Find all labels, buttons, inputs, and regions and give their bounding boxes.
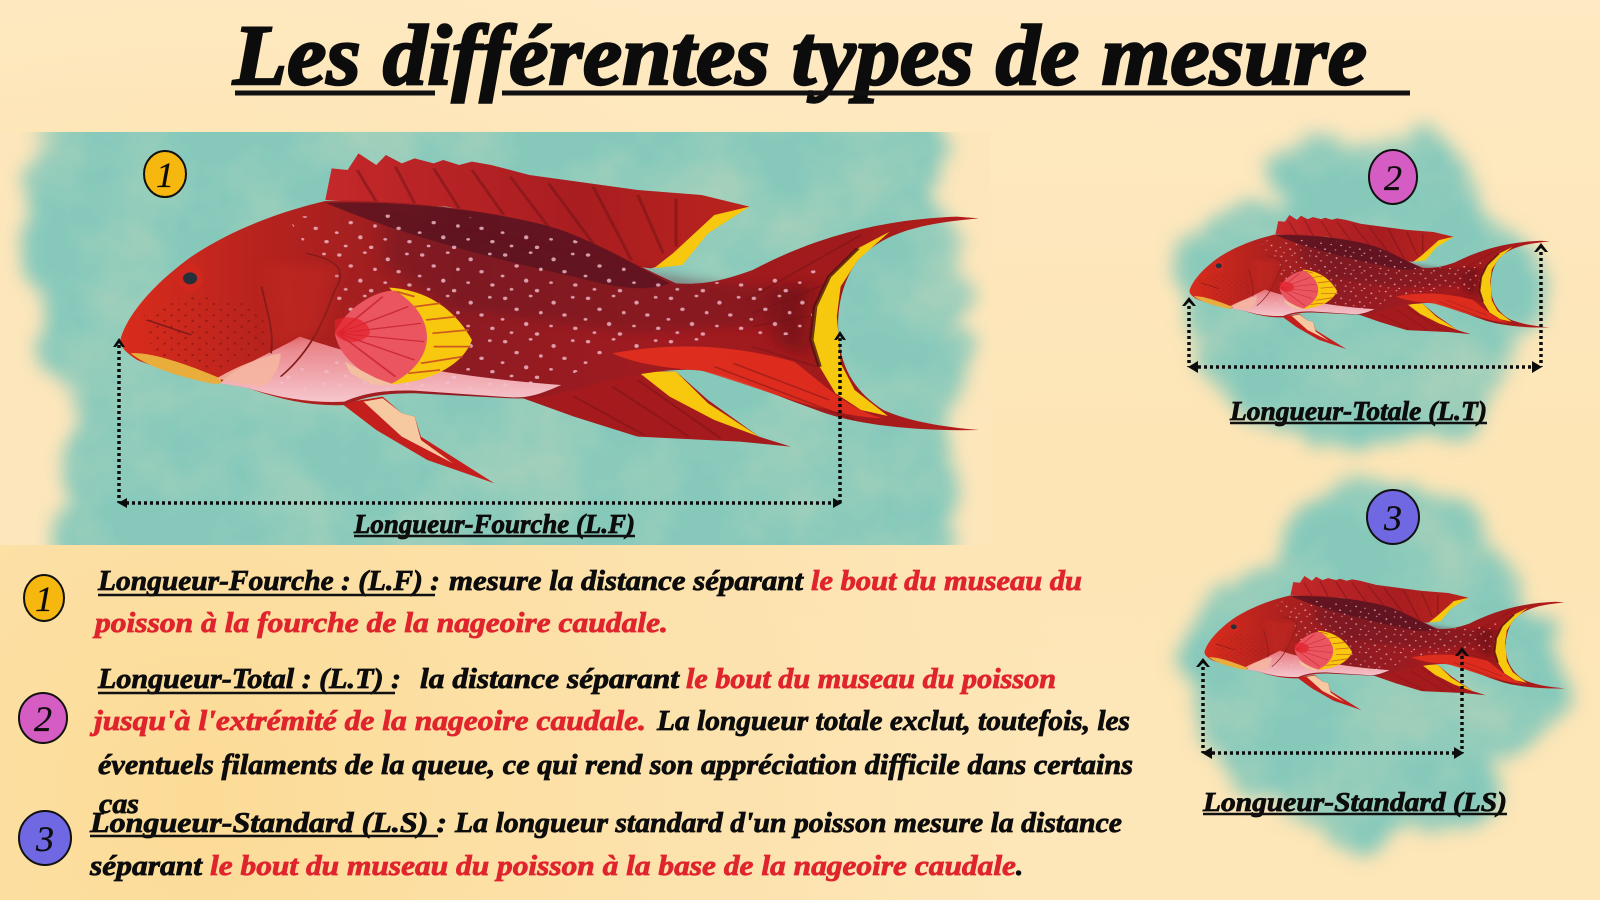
icon: badge 3 [19,811,71,865]
fish illustration [120,153,979,483]
icon: badge 1: 1 [156,155,174,195]
fish illustration [1205,576,1565,710]
icon: badge 2: 2 [1384,158,1402,198]
text block: total length definition: Longueur-Total : (L.T) : [97,663,401,695]
icon: badge 1 [24,575,64,621]
icon: badge 3: 3 [35,819,54,859]
text block: total length definition: la distance séparant [420,663,680,695]
panel: main fish, fork length [0,132,987,545]
text block: fork length definition: le bout du museau du [811,565,1082,597]
text block: total length definition: cas [99,788,139,820]
text block: standard length definition [19,807,1122,882]
watercolour backdrop [0,132,987,545]
title: Les différentes types de mesure [232,7,1367,103]
caption: Longueur-Totale: Longueur-Totale (L.T) [1229,396,1487,426]
icon: badge 2: 2 [34,699,52,739]
icon: badge 3 [1367,490,1419,544]
text block: fork length definition: Longueur-Fourche : (L.F) : [97,565,440,597]
icon: badge 1 [144,151,186,197]
panel: total length figure [1175,135,1550,445]
arrow: standard length measure [1196,647,1469,759]
text block: fork length definition [24,565,1082,639]
text block: fork length definition: poisson à la fourche de la nageoire caudale. [92,607,668,639]
icon: badge 3: 3 [1383,498,1402,538]
text block: fork length definition: mesure la distance séparant [449,565,804,597]
text block: standard length definition: Longueur-Standard (L.S) : [89,807,447,839]
watercolour backdrop [1180,485,1565,840]
text block: standard length definition: séparant [89,850,203,882]
text block: total length definition [19,663,1133,820]
watercolour backdrop [1175,135,1545,445]
text block: total length definition: jusqu'à l'extrémité de la nageoire caudale. [90,705,646,737]
text block: total length definition: La longueur totale exclut, toutefois, les [656,705,1130,737]
caption: Longueur-Fourche: Longueur-Fourche (L.F) [353,509,635,539]
panel: standard length figure [1180,485,1565,840]
text block: total length definition: le bout du museau du poisson [686,663,1056,695]
text block: standard length definition: le bout du museau du poisson à la base de la nageoire caudale [210,850,1016,882]
icon: badge 1: 1 [35,579,53,619]
icon: badge 2 [19,693,67,743]
text block: standard length definition: La longueur standard d'un poisson mesure la distance [454,807,1122,839]
arrow: total length measure [1182,243,1548,373]
icon: badge 2 [1369,150,1417,204]
caption: Longueur-Standard: Longueur-Standard (LS) [1202,787,1507,817]
text block: total length definition: éventuels filaments de la queue, ce qui rend son appréciation difficile dans certains [98,749,1133,781]
text block: standard length definition: . [1016,850,1023,882]
arrow: fork length measure [113,331,846,508]
fish illustration [1190,215,1550,349]
